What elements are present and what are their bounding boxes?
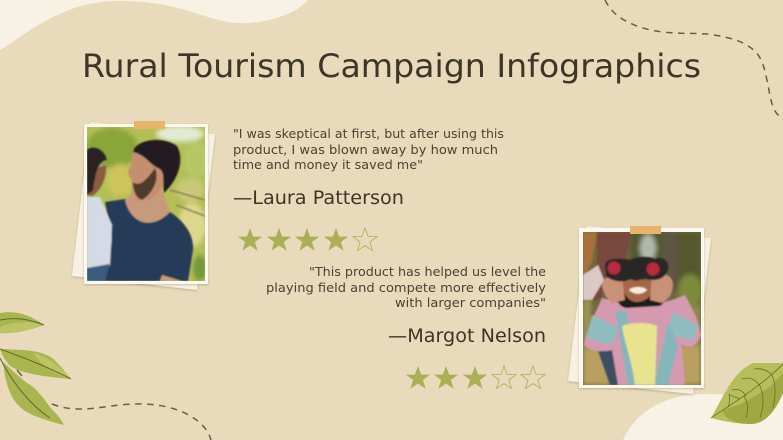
photo card: Laura Patterson xyxy=(72,122,215,290)
dashed path: top right xyxy=(605,0,783,119)
leaves: bottom left xyxy=(0,312,71,425)
blob: top left xyxy=(0,0,308,50)
quote: Margot Nelson xyxy=(266,264,547,310)
photo: man holding child xyxy=(86,126,208,281)
quote: Margot Nelson: playing field and compete more effectively xyxy=(266,280,547,295)
tape: photo 2 xyxy=(630,226,661,234)
quote: Laura Patterson: time and money it saved me" xyxy=(233,157,423,172)
name: Laura Patterson: —Laura Patterson xyxy=(233,187,404,209)
title: Rural Tourism Campaign Infographics xyxy=(82,47,701,85)
back paper xyxy=(72,122,215,290)
photo card: Margot Nelson xyxy=(568,226,711,394)
quote: Margot Nelson: with larger companies" xyxy=(395,295,546,310)
rating: 3 of 5 stars xyxy=(406,366,545,389)
quote: Laura Patterson: product, I was blown away by how much xyxy=(233,142,498,157)
blob: bottom right xyxy=(623,388,783,440)
tape: photo 1 xyxy=(134,121,165,129)
quote: Margot Nelson: "This product has helped us level the xyxy=(309,264,546,279)
quote: Laura Patterson xyxy=(233,126,504,172)
quote: Laura Patterson: "I was skeptical at first, but after using this xyxy=(233,126,504,141)
rating: 4 of 5 stars xyxy=(238,228,377,251)
name: Margot Nelson: —Margot Nelson xyxy=(388,325,546,347)
leaf: bottom right xyxy=(711,363,783,424)
dashed path: bottom left xyxy=(52,404,211,440)
frame xyxy=(84,124,208,284)
frame xyxy=(579,228,704,388)
photo: girl with binoculars xyxy=(583,232,702,385)
back paper xyxy=(568,226,711,394)
